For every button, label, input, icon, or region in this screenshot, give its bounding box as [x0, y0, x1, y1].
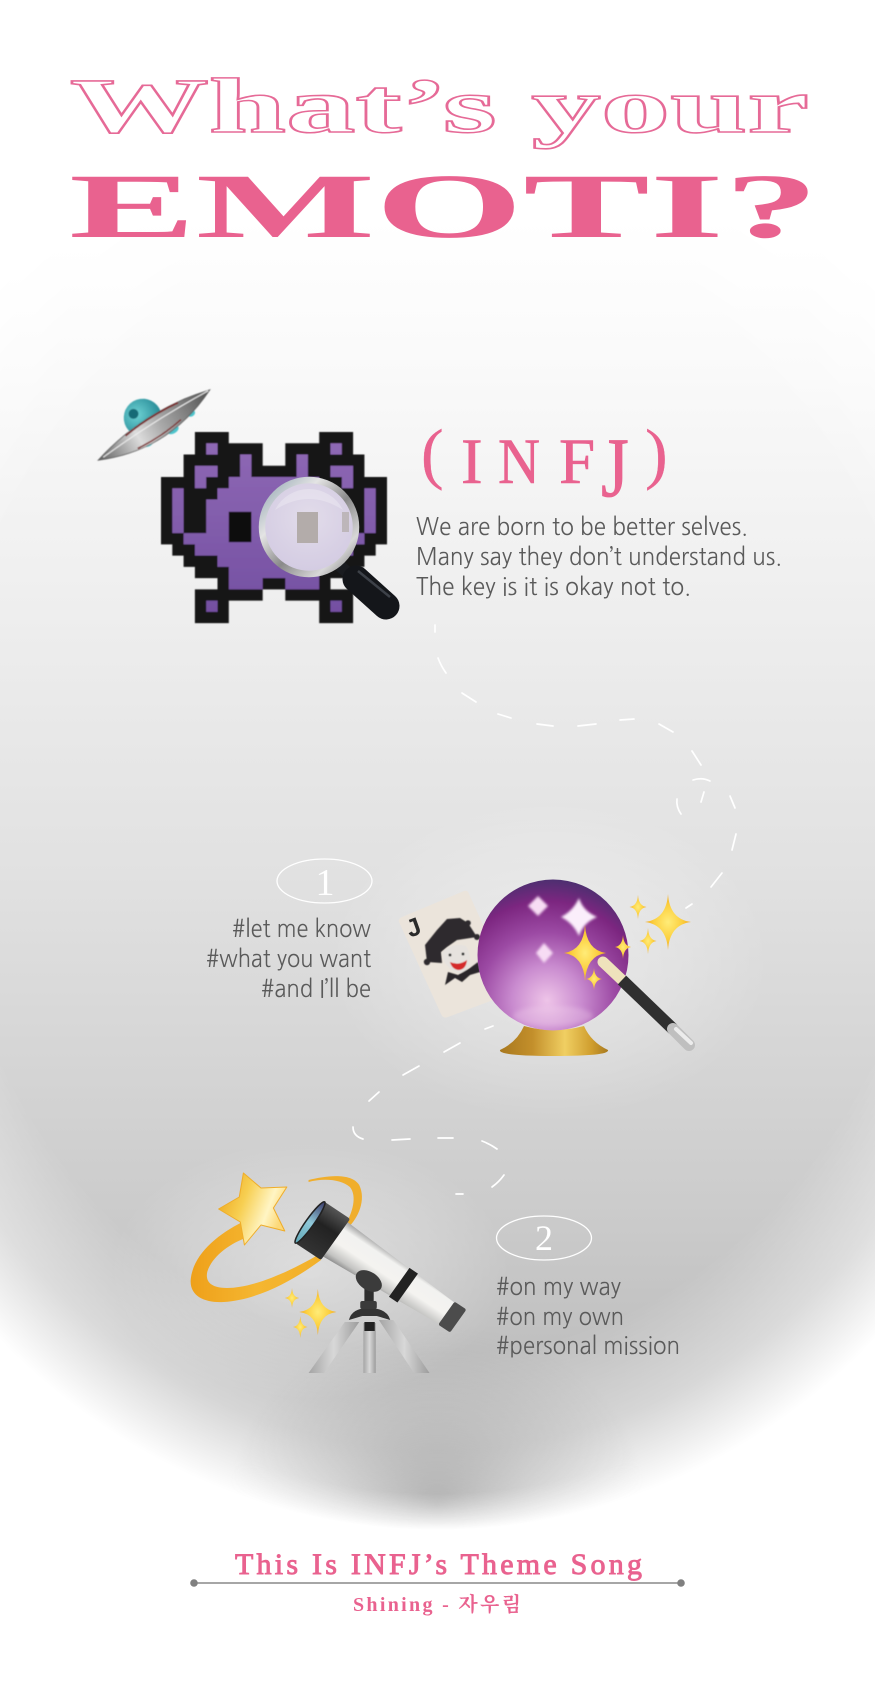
text block: section 1 hashtags: #let me know: [232, 917, 371, 941]
text block: section 2 hashtags: #on my own: [496, 1305, 624, 1329]
icon: pixel alien with magnifying glass: [161, 432, 390, 623]
icon: crystal ball: [478, 880, 628, 1056]
heading: (INFJ): I: [461, 426, 483, 498]
heading: (INFJ): [421, 415, 668, 514]
tube: [292, 1200, 473, 1342]
text block: section 1 hashtags: [206, 917, 371, 1001]
text block: section 1 hashtags: #and I’ll be: [261, 977, 371, 1001]
text block: INFJ description: [416, 515, 782, 599]
icon: shooting star orbit: [191, 1173, 362, 1302]
heading: (INFJ): ): [645, 415, 668, 491]
dashed path: upper trail: [435, 625, 736, 908]
text block: INFJ description: The key is it is okay not to.: [416, 575, 691, 599]
section 1 badge: [277, 859, 372, 904]
icon: telescope: [292, 1200, 473, 1373]
card letter J: J: [402, 912, 425, 943]
text block: section 1 hashtags: #what you want: [206, 947, 371, 971]
title line 2: EMOTI?: EMOTI?: [69, 155, 819, 257]
footer subheading: Shining - 자우림: [353, 1592, 521, 1616]
text block: section 2 hashtags: #personal mission: [496, 1334, 680, 1358]
icon: magic wand: [603, 962, 691, 1045]
text block: INFJ description: Many say they don’t understand us.: [416, 545, 782, 569]
icon: sparkles near telescope: [285, 1288, 336, 1338]
heading: (INFJ): N: [498, 426, 540, 498]
footer rule with end dots: [190, 1579, 685, 1587]
glints: [528, 896, 597, 963]
text block: INFJ description: We are born to be better selves.: [416, 515, 748, 539]
magnifying glass: [262, 480, 390, 606]
tripod legs: [309, 1283, 430, 1373]
title: [69, 62, 819, 257]
text block: section 2 hashtags: [496, 1275, 680, 1358]
jester: [424, 918, 480, 985]
text block: section 2 hashtags: #on my way: [496, 1275, 621, 1299]
heading: (INFJ): J: [601, 420, 629, 514]
pixel alien: [161, 432, 387, 623]
heading: (INFJ): (: [421, 415, 444, 491]
gold base: [500, 1026, 608, 1056]
section 2 badge: [496, 1216, 592, 1260]
heading: (INFJ): F: [559, 426, 595, 498]
icon: flying saucer: [81, 365, 220, 474]
section 2 badge: 2: [535, 1218, 553, 1258]
icon: sparkles around crystal ball: [564, 894, 691, 990]
footer heading: This Is INFJ’s Theme Song: [235, 1548, 642, 1581]
title line 1: What's your: What’s your: [70, 62, 809, 149]
background: grey spotlight gradient: [0, 421, 875, 1526]
purple sphere: [478, 880, 628, 1030]
star: [219, 1173, 287, 1245]
dashed path: lower trail: [353, 1026, 504, 1194]
icon: joker card: [399, 891, 512, 1018]
section 1 badge: 1: [316, 862, 334, 904]
footer: theme song: [190, 1548, 685, 1616]
